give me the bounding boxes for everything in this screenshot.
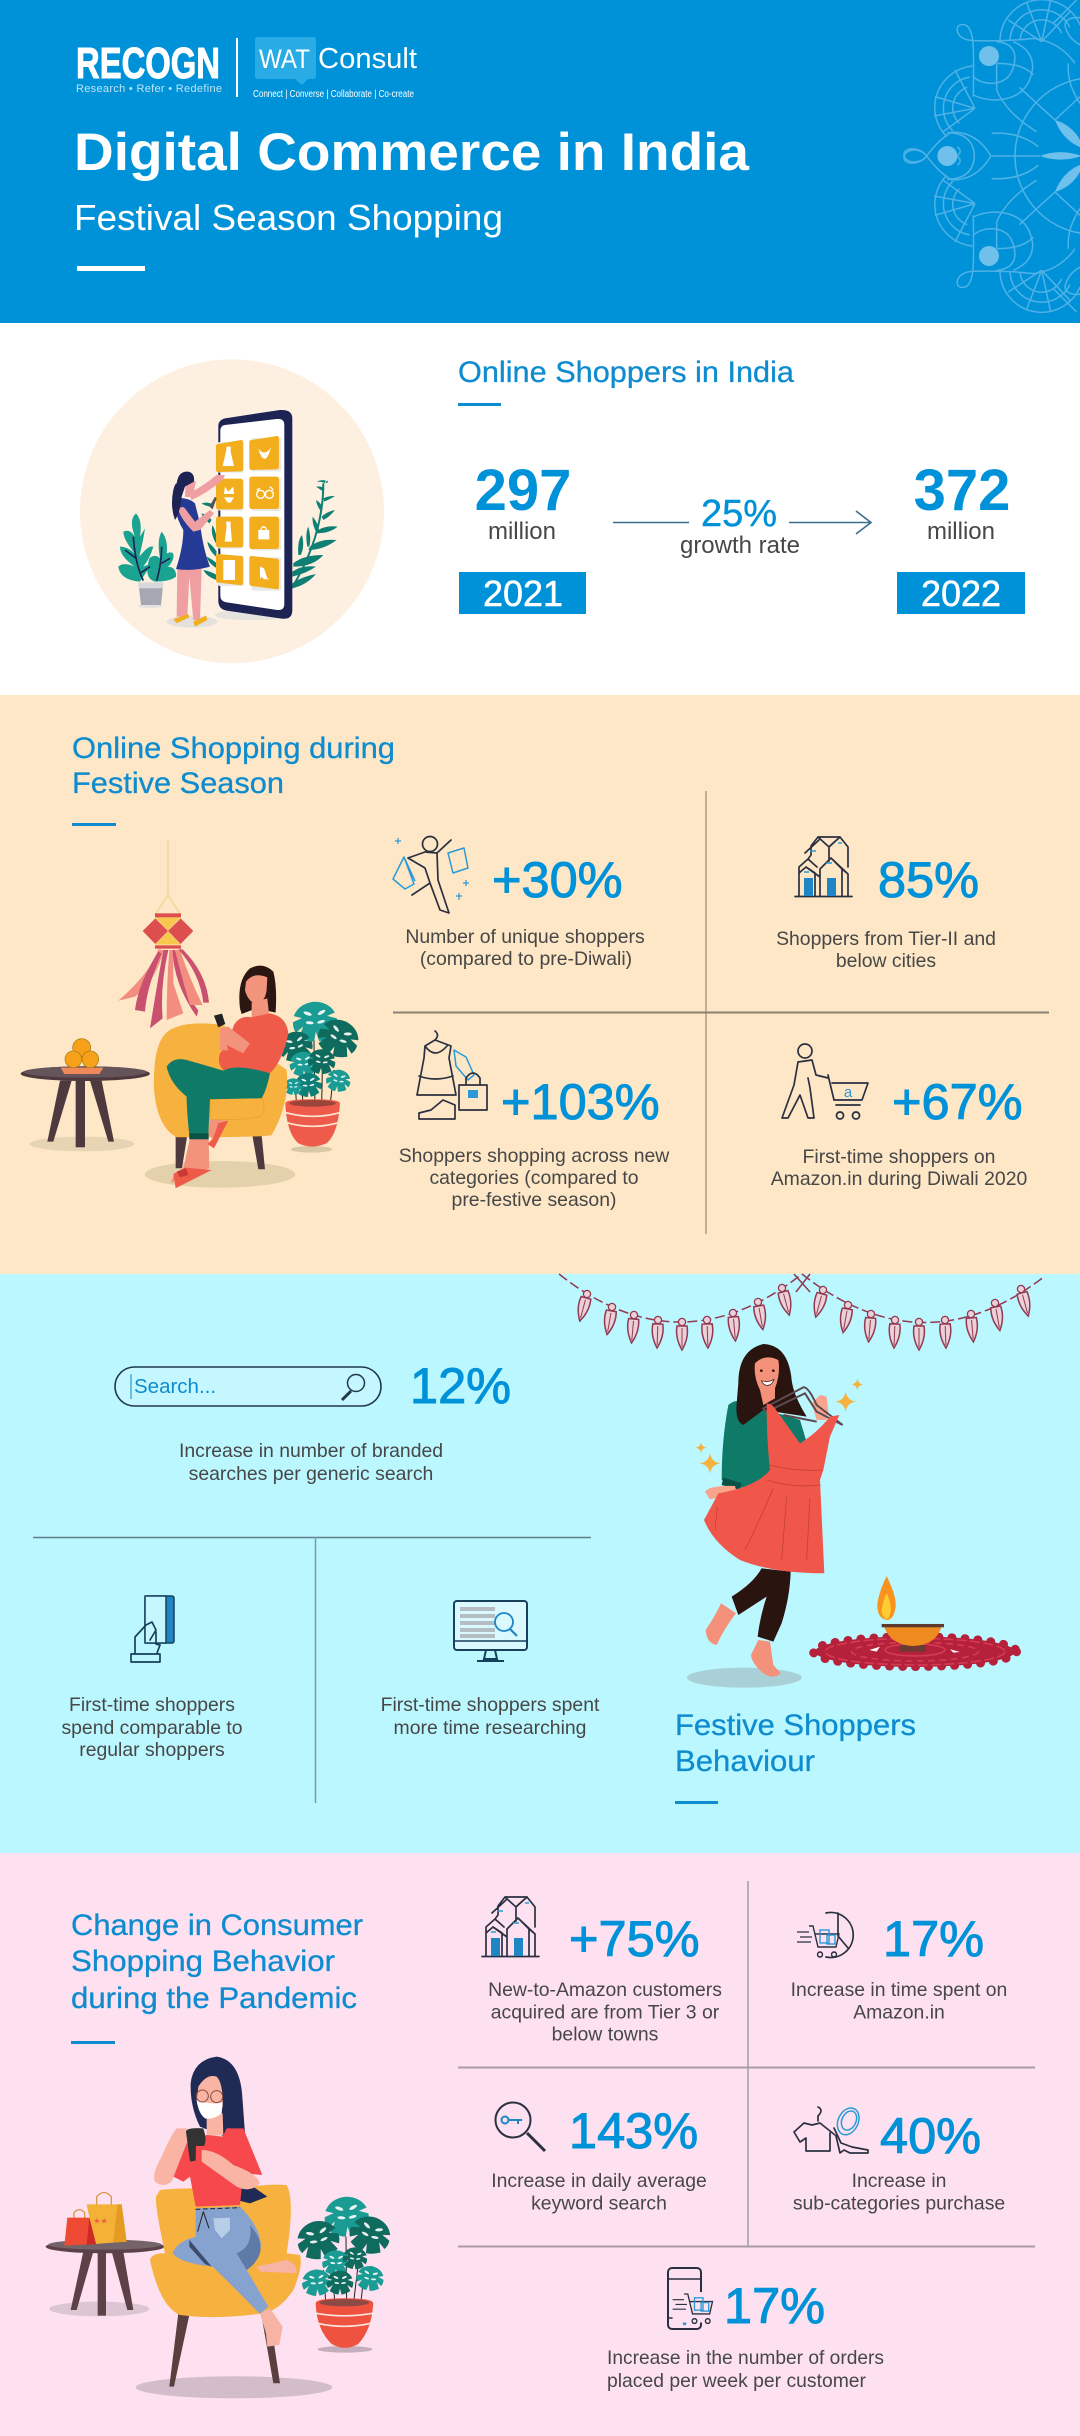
illustration: woman in armchair with lantern [21, 840, 365, 1188]
icon: hand holding card [131, 1596, 174, 1662]
stat: 40%: Increase in [852, 2170, 946, 2192]
rangoli and diya [813, 1576, 1017, 1667]
heading [71, 1909, 363, 2044]
stat: 2022: million [927, 518, 995, 545]
chair and woman [136, 2057, 332, 2398]
icon: phone with cart [668, 2268, 714, 2329]
logo: Recogn [76, 39, 222, 95]
background mandala decoration [904, 0, 1080, 312]
stat: 2021: 2021 [483, 573, 563, 614]
icon: happy shopper [393, 836, 469, 913]
panel: online shoppers in India [0, 323, 1080, 695]
stat: first-time shoppers spend [61, 1596, 243, 1761]
stat: 143% [491, 2102, 707, 2214]
panel: online shopping during festive season [0, 695, 1080, 1274]
heading: Festive Season [72, 767, 284, 800]
stat: 17% orders [607, 2268, 884, 2392]
icon: dress, bag and shoe [417, 1031, 487, 1119]
subtitle: Festival Season Shopping [74, 197, 503, 238]
logo: WAT Consult [253, 37, 417, 100]
stat: +30%: Number of unique shoppers [405, 926, 645, 948]
stat: +67%: +67% [892, 1073, 1023, 1130]
stat: 12% [115, 1357, 511, 1485]
icon: person with amazon cart: a [844, 1084, 853, 1101]
logo: WAT Consult: WAT [259, 44, 310, 74]
stat: 85%: below cities [836, 950, 936, 972]
stat: 143%: 143% [569, 2102, 698, 2159]
stat: +103%: categories (compared to [429, 1167, 639, 1189]
heading: during the Pandemic [71, 1982, 357, 2015]
tiles [218, 438, 281, 591]
panel: header [0, 0, 1080, 323]
lantern [118, 840, 209, 1028]
growth arrow: growth rate [680, 532, 800, 559]
stat: 17% time spent: Increase in time spent on [791, 1979, 1007, 2001]
stat: first-time shoppers spend: spend comparable to [61, 1717, 243, 1739]
stat: 12%: 12% [410, 1357, 511, 1414]
icon: search bar: Search... [134, 1375, 216, 1398]
growth arrow: 25% [701, 493, 777, 535]
plant [276, 1000, 365, 1153]
stat: 2021: million [488, 518, 556, 545]
icon: person with amazon cart [782, 1044, 868, 1119]
growth arrow [613, 493, 871, 559]
stat: 2021: 297 [475, 458, 571, 523]
icon: houses [795, 837, 852, 896]
stat: 12%: searches per generic search [189, 1463, 433, 1485]
icon: shirt, heel, ring [794, 2107, 868, 2153]
stat: first-time shoppers researching: First-time shoppers spent [381, 1694, 600, 1716]
stat: first-time shoppers spend: First-time shoppers [69, 1694, 235, 1716]
stat: +67%: Amazon.in during Diwali 2020 [771, 1168, 1027, 1190]
stat: 40%: 40% [880, 2107, 981, 2164]
heading [72, 732, 395, 826]
table with bags: ★★ [93, 2216, 108, 2225]
stat: 17% time spent [791, 1910, 1007, 2024]
stat: +75%: acquired are from Tier 3 or [491, 2002, 720, 2024]
stat: 17% time spent: 17% [883, 1910, 984, 1967]
heading [675, 1709, 916, 1804]
logo: WAT Consult: Consult [318, 43, 417, 75]
logo: Recogn: RECOGN [76, 39, 220, 88]
woman [695, 1344, 863, 1677]
panel: festive shoppers behaviour [0, 1274, 1080, 1853]
stat: +30% [393, 836, 645, 970]
table [21, 1039, 150, 1151]
panel: change in consumer behaviour [0, 1853, 1080, 2436]
plant [293, 2195, 395, 2353]
garland [559, 1274, 1045, 1350]
heading: Online Shoppers in India [458, 356, 794, 389]
stat: first-time shoppers researching: more time researching [394, 1717, 586, 1739]
icon: key magnifier [496, 2102, 545, 2151]
stat: first-time shoppers spend: regular shoppers [79, 1739, 225, 1761]
heading: Online Shopping during [72, 732, 395, 765]
stat: first-time shoppers researching [381, 1601, 600, 1739]
heading: Festive Shoppers [675, 1709, 916, 1742]
stat: +103%: Shoppers shopping across new [399, 1145, 670, 1167]
icon: search bar [115, 1367, 381, 1406]
logo: Recogn: Research • Refer • Redefine [76, 83, 222, 95]
stat: 17% orders: placed per week per customer [607, 2370, 867, 2392]
stat: 143%: keyword search [531, 2192, 667, 2214]
stat: 2022: 372 [914, 458, 1010, 523]
stat: +30%: +30% [492, 851, 623, 908]
armchair and woman [145, 966, 295, 1188]
stat: +75% [482, 1897, 722, 2046]
stat: 85%: Shoppers from Tier-II and [776, 928, 996, 950]
potted plant [137, 604, 163, 608]
stat: 40% [793, 2107, 1005, 2214]
stat: 2022 [897, 458, 1025, 614]
stat: 17% time spent: Amazon.in [853, 2002, 945, 2024]
stat: +103% [399, 1031, 670, 1211]
title: Digital Commerce in India [74, 123, 750, 182]
stat: +67%: First-time shoppers on [803, 1146, 995, 1168]
heading: Change in Consumer [71, 1909, 363, 1942]
stat: 17% orders: 17% [724, 2277, 825, 2334]
stat: +30%: (compared to pre-Diwali) [420, 948, 632, 970]
illustration: masked woman on armchair [46, 2057, 395, 2398]
illustration: woman browsing a giant phone [80, 359, 384, 663]
stat: 85%: 85% [878, 851, 979, 908]
illustration: woman with dress and diya [687, 1344, 1017, 1688]
woman [167, 616, 217, 628]
stat: 2022: 2022 [921, 573, 1001, 614]
stat: +67% [771, 1044, 1027, 1190]
stat: 17% orders: Increase in the number of orders [607, 2347, 884, 2369]
stat: +75%: below towns [552, 2024, 658, 2046]
stat: 40%: sub-categories purchase [793, 2192, 1005, 2214]
stat: 85% [776, 837, 996, 972]
icon: houses [482, 1897, 539, 1956]
stat: 2021 [459, 458, 586, 614]
stat: 143%: Increase in daily average [491, 2170, 707, 2192]
stat: +103%: pre-festive season) [452, 1189, 616, 1211]
stat: +103%: +103% [501, 1073, 660, 1130]
table with bags [46, 2192, 164, 2316]
heading: Shopping Behavior [71, 1945, 335, 1978]
icon: monitor with magnifier [454, 1601, 527, 1661]
stat: +75%: New-to-Amazon customers [488, 1979, 722, 2001]
heading: Behaviour [675, 1745, 815, 1778]
icon: cart and clock [797, 1912, 853, 1957]
logo: WAT Consult: Connect | Converse | Collaborate | Co-create [253, 89, 414, 100]
stat: 12%: Increase in number of branded [179, 1440, 443, 1462]
stat: +75%: +75% [569, 1910, 700, 1967]
